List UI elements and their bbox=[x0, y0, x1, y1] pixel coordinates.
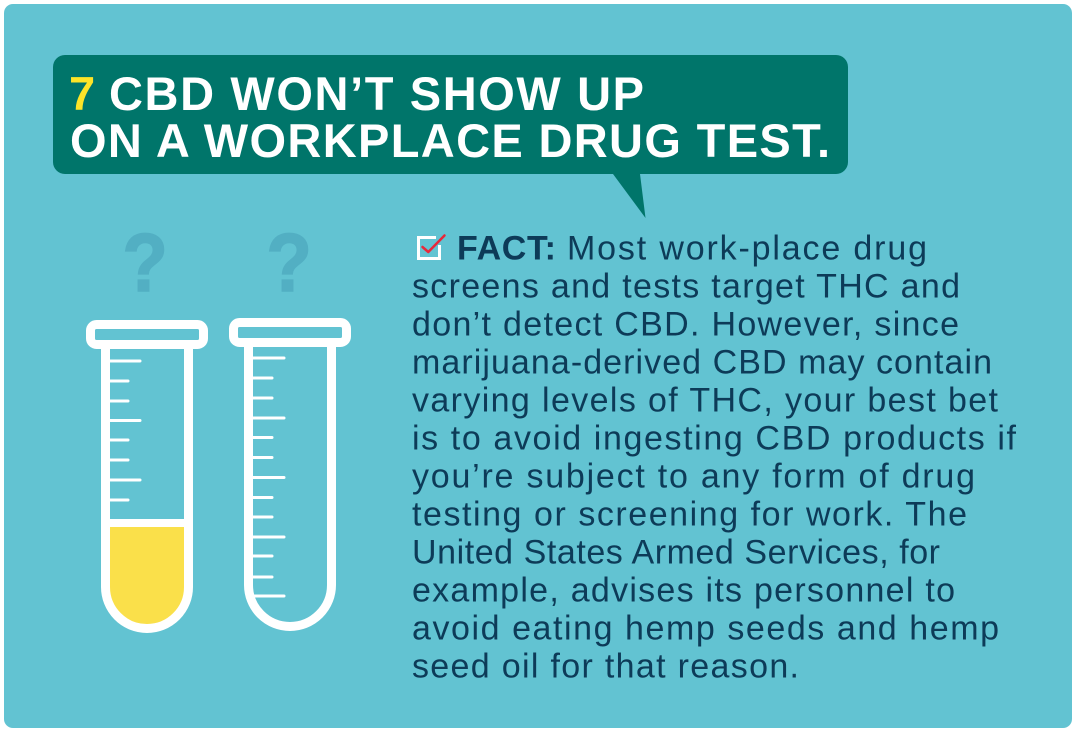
fact text block: you’re subject to any form of drug bbox=[412, 458, 975, 496]
fact text block: example, advises its personnel to bbox=[412, 572, 955, 610]
tube ticks bbox=[108, 361, 140, 500]
fact text block: is to avoid ingesting CBD products if bbox=[412, 420, 1017, 458]
tube ticks bbox=[251, 358, 284, 596]
fact text block: United States Armed Services, for bbox=[412, 534, 940, 572]
fact text block: testing or screening for work. The bbox=[412, 496, 967, 534]
fact text block: Most work-place drug bbox=[567, 230, 927, 268]
fact text block: seed oil for that reason. bbox=[412, 648, 799, 686]
fact text block: screens and tests target THC and bbox=[412, 268, 960, 306]
fact text block: varying levels of THC, your best bet bbox=[412, 382, 999, 420]
liquid line bbox=[105, 519, 189, 527]
tube cap bbox=[234, 322, 346, 342]
yellow liquid bbox=[109, 527, 185, 625]
fact text block: FACT: bbox=[457, 230, 556, 268]
icon: test tube with yellow liquid bbox=[90, 324, 204, 628]
icon: checkbox with red check bbox=[418, 236, 444, 258]
speech bubble heading bbox=[53, 55, 848, 218]
bubble shape bbox=[53, 55, 848, 218]
fact text block: marijuana-derived CBD may contain bbox=[412, 344, 992, 382]
icon: empty test tube bbox=[234, 322, 346, 626]
tube body bbox=[106, 345, 188, 628]
fact text block: don’t detect CBD. However, since bbox=[412, 306, 959, 344]
heading line 1: CBD WON’T SHOW UP bbox=[109, 67, 644, 120]
tube body bbox=[248, 343, 332, 626]
fact text block: avoid eating hemp seeds and hemp bbox=[412, 610, 999, 648]
fact text block bbox=[412, 230, 1017, 686]
heading line 2: ON A WORKPLACE DRUG TEST. bbox=[70, 114, 830, 167]
tube cap bbox=[90, 324, 204, 344]
icon: question mark left: ? bbox=[122, 216, 168, 309]
icon: question mark right: ? bbox=[266, 216, 312, 309]
heading number: 7 bbox=[69, 67, 95, 120]
